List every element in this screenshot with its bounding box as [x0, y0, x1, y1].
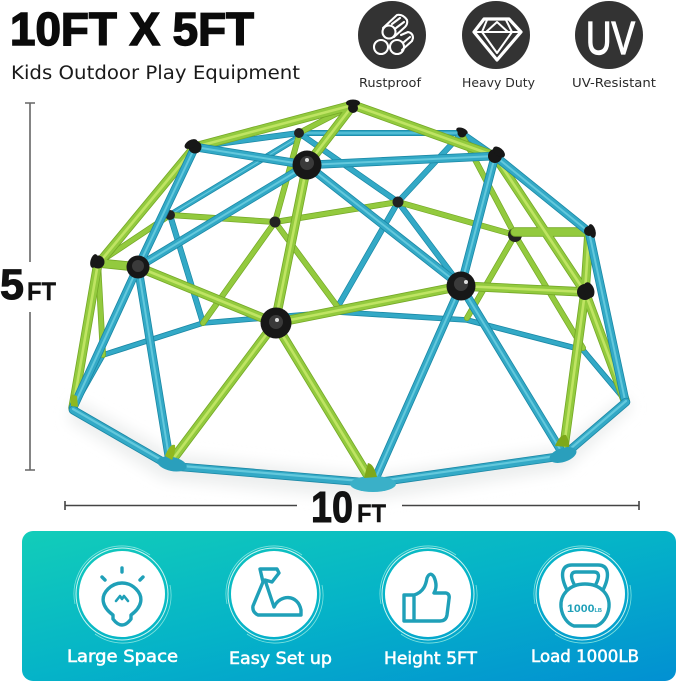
- label: Large Space: [67, 647, 178, 666]
- label: Heavy Duty: [462, 76, 535, 90]
- feature: load: [531, 546, 639, 666]
- label: Height 5FT: [384, 649, 478, 668]
- height dimension: [0, 103, 56, 470]
- feature: height: [380, 546, 478, 668]
- label: Rustproof: [359, 76, 422, 90]
- front green tubes: [73, 105, 625, 484]
- icon: UV: UV: [586, 12, 635, 64]
- height dimension: FT: [27, 278, 56, 306]
- small back joints: [165, 128, 522, 242]
- icon: pipes: [358, 1, 426, 69]
- feature: uv resistant: [572, 1, 656, 90]
- front blue tubes: [73, 147, 625, 484]
- feature: heavy duty: [462, 1, 535, 90]
- width dimension: [65, 483, 639, 532]
- front base ring: [73, 401, 626, 483]
- width dimension: 10: [311, 483, 353, 532]
- label: Easy Set up: [229, 649, 332, 668]
- icon: kettlebell: 1000 LB: [567, 603, 602, 615]
- back struts green: [98, 105, 583, 355]
- icon: diamond: [462, 1, 530, 69]
- width dimension: FT: [357, 500, 386, 528]
- dome frame: [71, 100, 626, 492]
- height dimension: 5: [0, 261, 24, 309]
- icon: muscle: [253, 569, 301, 615]
- label: Load 1000LB: [531, 647, 639, 666]
- panel: features: [22, 531, 676, 681]
- back ring: [73, 312, 625, 408]
- title: 10FT X 5FT: [10, 3, 254, 55]
- black hubs: [89, 100, 597, 338]
- floor shadow: [68, 396, 632, 500]
- label: UV-Resistant: [572, 76, 656, 90]
- back struts blue: [170, 133, 495, 323]
- feature: large space: [67, 546, 178, 666]
- feature: easy set up: [226, 546, 332, 668]
- subtitle: Kids Outdoor Play Equipment: [11, 63, 300, 84]
- feature: rustproof: [358, 1, 426, 90]
- base connectors: [71, 394, 578, 492]
- icon: bulb: [102, 568, 143, 625]
- icon: thumbs up: [404, 574, 449, 621]
